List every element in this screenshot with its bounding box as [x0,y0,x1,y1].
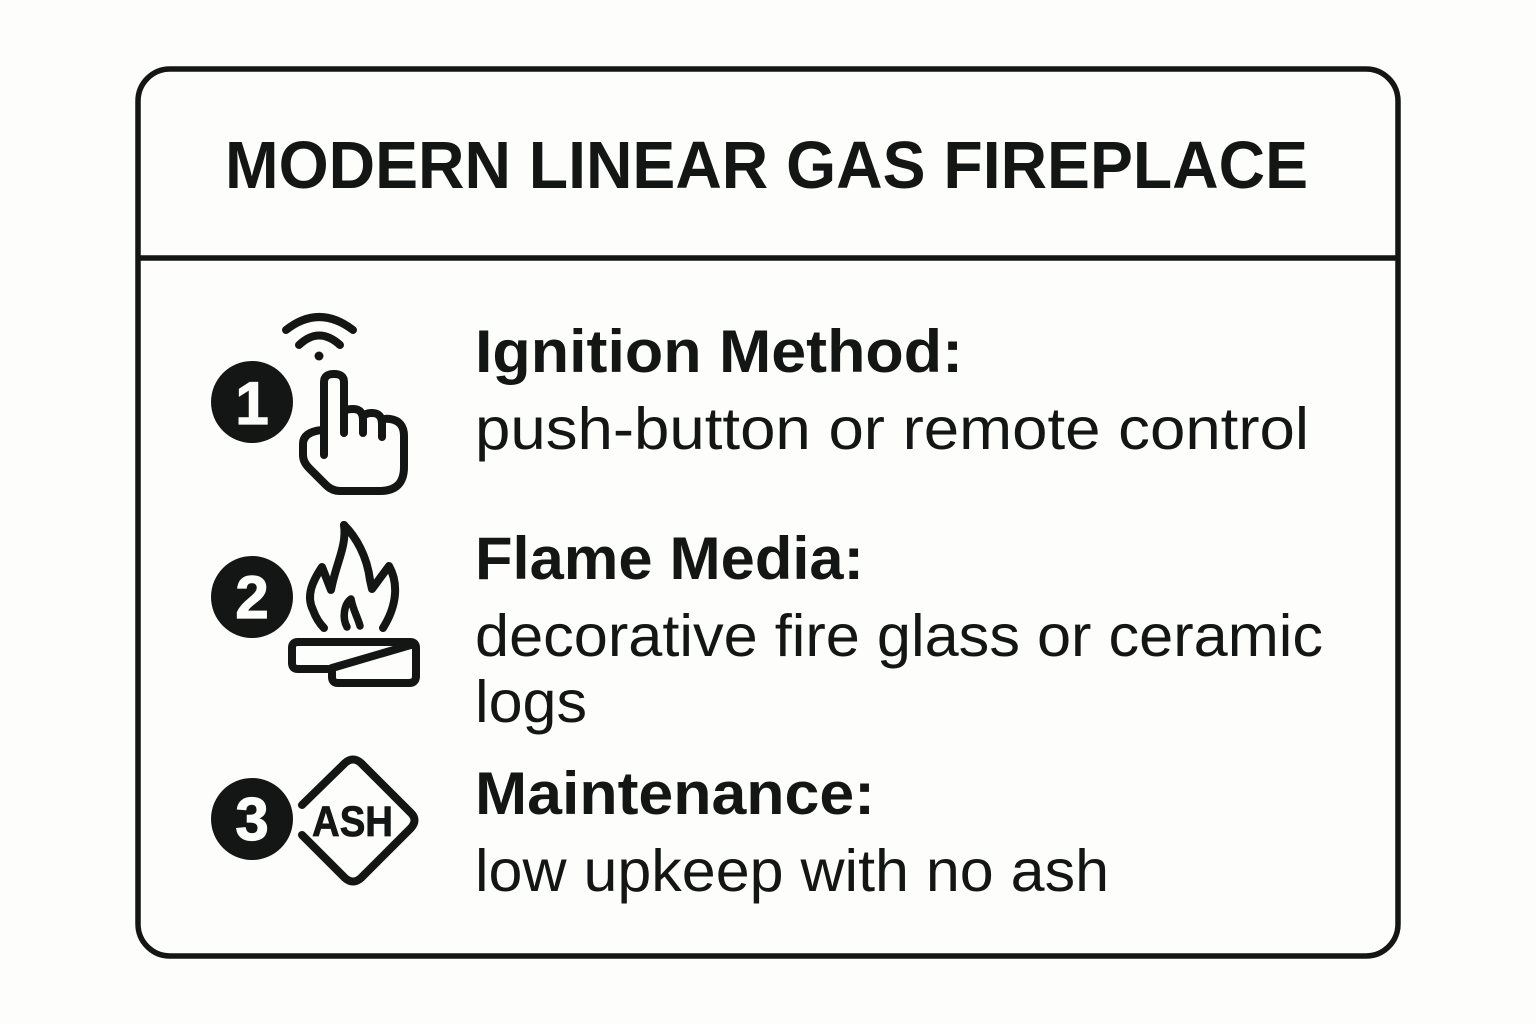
text block: maintenance: low upkeep with no ash [475,838,1109,904]
text block: flame media: logs [475,669,587,735]
badge: number 3: 3 [235,786,269,853]
icon: ash diamond: ASH [312,798,393,846]
text block: flame media: decorative fire glass or ceramic [475,603,1323,669]
text block: ignition method [475,318,1309,462]
text block: ignition method: push-button or remote control [475,396,1309,462]
badge: number 1 [211,361,293,443]
icon: hand pressing button with wireless signal [286,317,404,491]
text block: maintenance [475,760,1109,904]
icon: ash diamond [302,760,414,882]
text block: flame media [475,525,1323,735]
text block: maintenance: Maintenance: [475,760,875,827]
badge: number 1: 1 [235,370,269,437]
badge: number 3 [211,778,293,860]
title: MODERN LINEAR GAS FIREPLACE [225,128,1308,203]
text block: flame media: Flame Media: [475,525,864,592]
panel: fireplace card [138,69,1398,956]
badge: number 2 [211,556,293,638]
badge: number 2: 2 [235,564,269,631]
icon: flame over fire glass and logs [292,525,416,683]
text block: ignition method: Ignition Method: [475,318,963,385]
